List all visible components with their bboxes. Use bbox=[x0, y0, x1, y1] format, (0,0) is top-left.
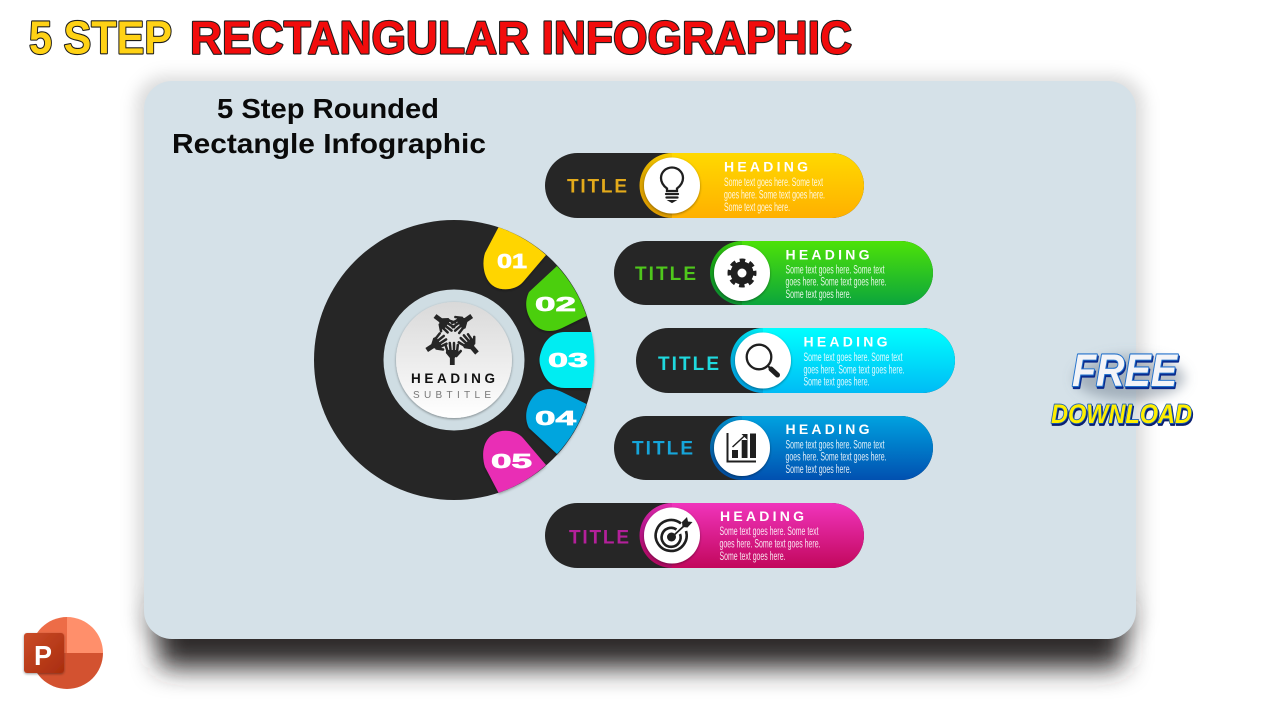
dark ring bbox=[314, 220, 594, 500]
free download badge: DOWNLOAD bbox=[1051, 399, 1192, 429]
card heading bbox=[172, 93, 486, 159]
pill 1: yellow step: HEADING bbox=[724, 159, 808, 175]
icon: target with arrow bbox=[656, 517, 692, 551]
center hub bbox=[384, 290, 524, 430]
main title: 5 STEP bbox=[29, 12, 172, 64]
icon: PowerPoint logo: P bbox=[34, 640, 52, 671]
tab 03: 03 bbox=[548, 350, 588, 372]
icon: gear bbox=[730, 260, 754, 286]
tab 02 bbox=[526, 266, 586, 331]
pill 2: green step: TITLE bbox=[635, 264, 696, 285]
pill 1: yellow step bbox=[545, 153, 864, 218]
pill 2: green step: goes here. Some text goes here. bbox=[786, 277, 886, 289]
card heading: 5 Step Rounded bbox=[217, 93, 439, 124]
pill 3: cyan step: Some text goes here. Some text bbox=[804, 352, 903, 364]
tab 02: 02 bbox=[535, 294, 576, 316]
pill 2: green step bbox=[614, 241, 933, 305]
main title: RECTANGULAR INFOGRAPHIC bbox=[190, 12, 852, 64]
pill 3: cyan step: HEADING bbox=[804, 334, 888, 350]
hub heading: HEADING bbox=[411, 371, 495, 386]
tab 05 bbox=[483, 431, 546, 493]
icon: bar chart bbox=[728, 433, 756, 462]
card heading: Rectangle Infographic bbox=[172, 128, 486, 159]
pill 1: yellow step: Some text goes here. bbox=[724, 202, 790, 214]
tab 03 bbox=[540, 332, 594, 388]
card shadow bbox=[136, 76, 1144, 668]
pill 3: cyan step: goes here. Some text goes here. bbox=[804, 364, 904, 376]
tab 01: 01 bbox=[497, 251, 527, 273]
pill 1: yellow step: Some text goes here. Some text bbox=[724, 177, 823, 189]
pill 4: blue step bbox=[614, 416, 933, 480]
tab 05: 05 bbox=[491, 451, 532, 473]
donut chart bbox=[314, 220, 594, 500]
free download badge bbox=[1051, 345, 1192, 429]
icon: magnifier bbox=[747, 345, 778, 375]
pill 5: magenta step: Some text goes here. bbox=[720, 551, 786, 563]
hub subtitle: SUBTITLE bbox=[413, 390, 491, 401]
pill 1: yellow step: goes here. Some text goes here. bbox=[724, 190, 825, 202]
pill 5: magenta step bbox=[545, 503, 864, 568]
pill 5: magenta step: Some text goes here. Some text bbox=[720, 526, 819, 538]
pill 2: green step: HEADING bbox=[786, 246, 870, 262]
tab 01 bbox=[483, 227, 546, 289]
pill 4: blue step: HEADING bbox=[786, 421, 870, 437]
pill 5: magenta step: TITLE bbox=[569, 527, 629, 548]
pill 2: green step: Some text goes here. Some text bbox=[786, 264, 885, 276]
panel: rounded rectangle card bbox=[144, 81, 1136, 639]
icon: light bulb bbox=[661, 168, 683, 202]
pill 5: magenta step: goes here. Some text goes here. bbox=[720, 538, 820, 550]
pill 4: blue step: goes here. Some text goes here. bbox=[786, 452, 886, 464]
icon: PowerPoint logo bbox=[24, 617, 103, 689]
pill 4: blue step: TITLE bbox=[632, 438, 693, 459]
icon: five hands bbox=[423, 309, 483, 365]
pill 3: cyan step bbox=[636, 328, 955, 393]
pill 1: yellow step: TITLE bbox=[567, 176, 627, 198]
pill 5: magenta step: HEADING bbox=[720, 508, 804, 524]
pill 2: green step: Some text goes here. bbox=[786, 289, 852, 301]
pill 3: cyan step: Some text goes here. bbox=[804, 377, 870, 389]
pill 3: cyan step: TITLE bbox=[658, 354, 719, 375]
free download badge: FREE bbox=[1072, 345, 1179, 396]
pill 4: blue step: Some text goes here. Some text bbox=[786, 439, 885, 451]
tab 04: 04 bbox=[535, 408, 578, 430]
tab 04 bbox=[526, 389, 586, 454]
pill 4: blue step: Some text goes here. bbox=[786, 464, 852, 476]
